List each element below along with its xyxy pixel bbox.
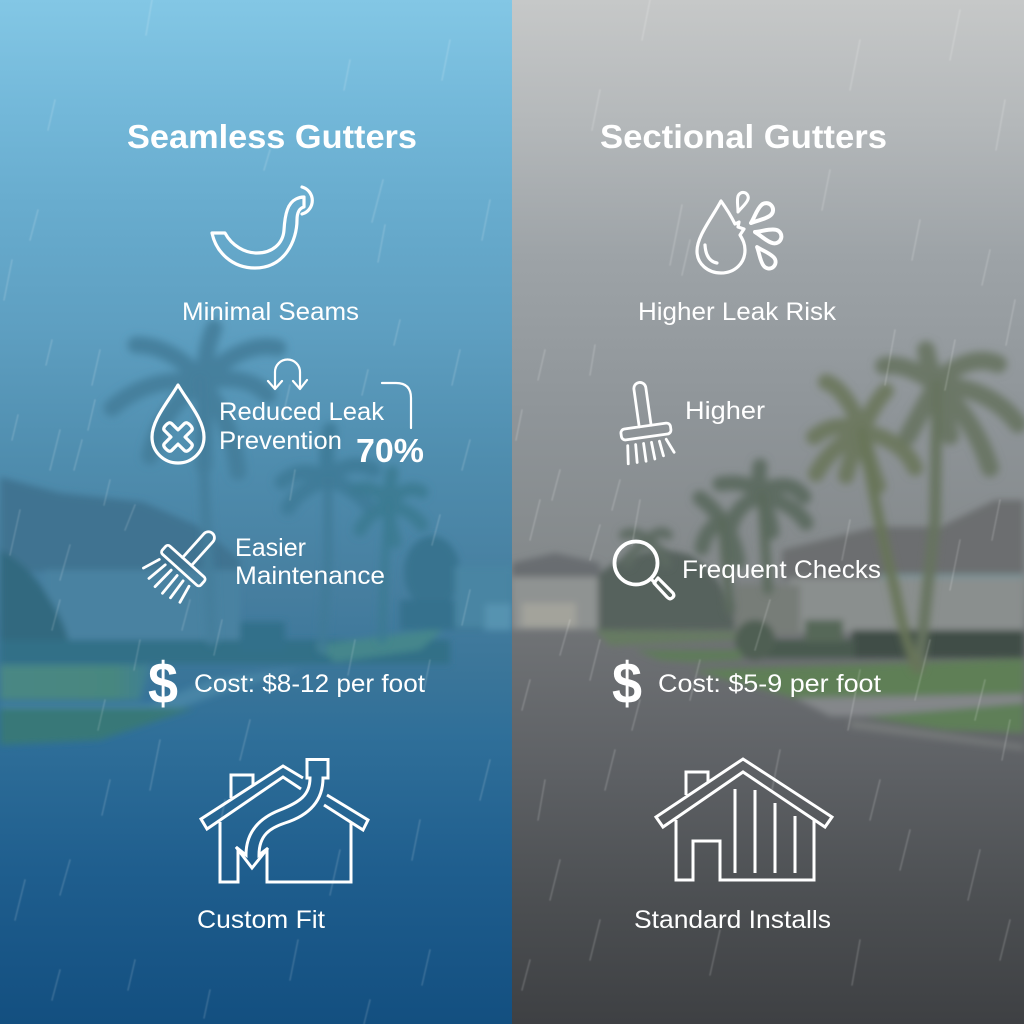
label: Easier Maintenance — [235, 534, 385, 590]
icon: curved arrows — [268, 360, 307, 389]
label: Custom Fit: Custom Fit — [197, 906, 325, 934]
panel: seamless background — [0, 0, 512, 1024]
label: cost seamless: Cost: $8-12 per foot — [194, 670, 425, 698]
palm 2 — [282, 430, 374, 650]
label: Easier Maintenance: Easier — [235, 534, 306, 562]
label: Easier Maintenance: Maintenance — [235, 562, 385, 590]
palm 3 — [354, 465, 429, 597]
icon: dollar left: $ — [148, 651, 178, 716]
label: Higher: Higher — [685, 397, 765, 425]
icon: house with downspout — [201, 760, 368, 882]
rain: sectional panel — [516, 0, 1015, 990]
palm 1 — [102, 318, 288, 564]
title: Sectional Gutters: Sectional Gutters — [600, 118, 887, 155]
label: Reduced Leak Prevention: Reduced Leak — [219, 398, 385, 426]
icon: magnifier — [614, 542, 674, 599]
label: Reduced Leak Prevention: Prevention — [219, 427, 342, 455]
icon: bracket line — [382, 383, 411, 428]
icon: broom left — [139, 515, 232, 609]
stat: 70%: 70% — [356, 432, 424, 469]
icon: standard house — [656, 759, 832, 880]
label: Minimal Seams: Minimal Seams — [182, 298, 359, 326]
palm R4 — [624, 532, 668, 563]
icon: gutter — [212, 187, 312, 268]
panel: sectional background — [512, 0, 1024, 1024]
rain: seamless panel — [4, 0, 490, 1024]
label: Higher Leak Risk: Higher Leak Risk — [638, 298, 837, 326]
palm R3 — [700, 466, 806, 610]
palm R2 — [814, 382, 916, 668]
label: Standard Installs: Standard Installs — [634, 906, 831, 934]
label: Reduced Leak Prevention — [219, 398, 385, 455]
label: Frequent Checks: Frequent Checks — [682, 556, 881, 584]
icon: drop with x — [152, 385, 204, 463]
icon: splashing drop — [697, 191, 783, 273]
palm R1 — [884, 350, 1018, 668]
label: cost sectional: Cost: $5-9 per foot — [658, 670, 881, 698]
icon: dollar right: $ — [612, 651, 642, 716]
title: Seamless Gutters: Seamless Gutters — [127, 118, 417, 155]
icon: broom right — [614, 379, 675, 464]
